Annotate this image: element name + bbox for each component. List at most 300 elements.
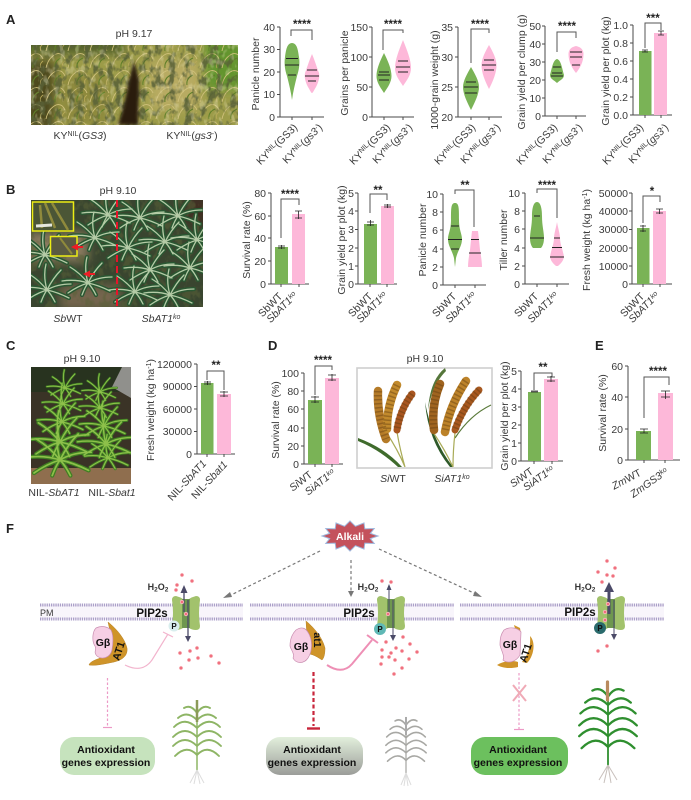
caption: KY NIL GS3: KY (54, 130, 68, 142)
bar chart: grain yield per plot: Grain yield per plot (kg) (600, 16, 612, 126)
caption: KY NIL gs3: KY (166, 130, 180, 142)
violin chart: tiller number: SbAT1 (525, 295, 556, 326)
label: PM: PM (40, 608, 54, 618)
violin chart: grain yield per clump: 30 (529, 57, 541, 69)
violin chart: panicle number: 4 (432, 244, 438, 256)
violin chart: panicle number: 10 (263, 89, 275, 101)
caption: KY NIL GS3: NIL (68, 131, 79, 138)
bar chart: grain yield per plot: 3 (511, 402, 517, 414)
caption: KY NIL GS3: ( (78, 130, 82, 142)
label: H2O2: O (368, 582, 375, 592)
channel: PIP2s right (597, 596, 625, 630)
label: H2O2: 2 (364, 586, 368, 594)
label: H2O2: 2 (375, 586, 379, 594)
violin chart: 1000-grain weight: gs3 (479, 126, 499, 146)
bar chart: survival rate: 100 (281, 368, 299, 380)
bar chart: survival rate: SiWT (287, 469, 315, 494)
violin chart: panicle number: NIL (265, 142, 278, 155)
bar chart: grain yield per plot: 2 (511, 420, 517, 432)
violin chart: grains per panicle: ( (388, 137, 399, 149)
bar chart: grain yield per plot: Grain yield per plot (kg) (336, 185, 348, 295)
box: antioxidant genes expression (60, 737, 155, 775)
arrow: alkali to left membrane (223, 551, 320, 598)
icon: wilted grey plant (386, 717, 426, 786)
box: antioxidant genes expression: genes expression (474, 757, 562, 769)
violin chart: panicle number: 0 (269, 112, 275, 124)
violin chart: grains per panicle: 50 (356, 82, 368, 94)
bar chart: survival rate: Survival rate (%) (241, 201, 253, 279)
violin chart: 1000-grain weight: 30 (441, 52, 453, 64)
bar chart: grain yield per plot: SiAT1 (521, 468, 551, 494)
violin chart: grains per panicle: NIL (358, 142, 371, 155)
violin chart: grains per panicle: (GS3) (365, 122, 393, 150)
channel: PIP2s middle (377, 596, 405, 630)
bar chart: fresh weight: 120000 (157, 359, 192, 371)
bar chart: fresh weight: 30000 (599, 224, 628, 236)
violin chart: grains per panicle: KY (370, 148, 389, 166)
box: antioxidant genes expression (471, 737, 568, 775)
violin chart: grains per panicle: - (403, 124, 410, 131)
arrow: H2O2 transport (180, 585, 191, 642)
bar chart: grain yield per plot (600, 13, 672, 168)
violin chart: 1000-grain weight: ) (492, 122, 503, 133)
bar chart: survival rate: 60 (287, 404, 299, 416)
protein complex: Gβ at1 (290, 621, 325, 662)
H2O2 molecules (174, 573, 221, 670)
caption: SiAT1ko: ko (462, 474, 470, 481)
caption: SiWT: SiWT (380, 473, 406, 485)
caption: SbWT: SbWT (53, 313, 83, 325)
box: antioxidant genes expression: Antioxidant (489, 744, 547, 756)
phospho site (168, 620, 180, 632)
divider: red dashed line (116, 200, 118, 307)
bar chart: grain yield per plot: ** (374, 185, 383, 197)
label: PIP2s: PIP2s (564, 607, 596, 619)
bar chart: fresh weight: 40000 (599, 206, 628, 218)
bar chart: fresh weight: 30000 (163, 426, 192, 438)
violin chart: grain yield per clump: 50 (529, 21, 541, 33)
icon: vigorous green plant (579, 682, 637, 783)
bar chart: survival rate: **** (281, 189, 299, 201)
protein complex: Gβ at1: Gβ (294, 641, 309, 653)
violin chart: 1000-grain weight: KY (432, 149, 451, 168)
label: H2O2: 2 (592, 586, 596, 594)
bar chart: grain yield per plot (336, 185, 397, 326)
caption: KY NIL GS3: GS3) (82, 130, 106, 142)
violin chart: grain yield per clump: KY (514, 149, 533, 168)
panel A: rice field trial (6, 12, 672, 168)
caption: NIL-SbAT1: NIL-SbAT1 (28, 487, 80, 499)
scenario 2: at1 mutant sensitive (266, 579, 426, 786)
label: H2O2: O (585, 582, 592, 592)
violin chart: 1000-grain weight: 35 (441, 22, 453, 34)
violin chart: grains per panicle: 150 (350, 22, 368, 34)
bar chart: grain yield per plot: KY (600, 149, 619, 168)
violin chart: panicle number: 8 (432, 207, 438, 219)
bar chart: survival rate: 0 (260, 279, 266, 291)
bar chart: survival rate: **** (314, 355, 332, 367)
bar chart: survival rate (241, 188, 309, 326)
violin chart: tiller number: 8 (514, 206, 520, 218)
icon: Alkali burst (322, 521, 378, 551)
violin chart: panicle number: KY (280, 148, 299, 166)
violin chart: 1000-grain weight: 20 (441, 112, 453, 124)
icon: blocked cross (513, 685, 526, 701)
bar chart: fresh weight: 90000 (163, 381, 192, 393)
bar chart: grain yield per plot: 3 (348, 224, 354, 236)
inhibition: at1 to P site (327, 635, 378, 670)
bar chart: fresh weight: NIL-SbAT1 (166, 458, 209, 503)
bar chart: fresh weight: -1 (582, 192, 589, 199)
violin chart: panicle number: Panicle number (250, 37, 262, 110)
heading: pH 9.10: pH 9.10 (407, 353, 444, 365)
photo: NIL sorghum plots (26, 367, 132, 484)
phospho site (594, 622, 606, 634)
violin chart: tiller number: 0 (514, 279, 520, 291)
label: PIP2s: PIP2s (136, 608, 168, 620)
violin chart: tiller number: 2 (514, 261, 520, 273)
panel letter A: A (6, 12, 16, 27)
label: H2O2: 2 (154, 586, 158, 594)
bar chart: survival rate: ZmGS3 (628, 470, 665, 500)
heading: pH 9.17: pH 9.17 (116, 28, 153, 40)
caption: KY NIL gs3: ) (214, 130, 218, 142)
bar chart: survival rate: ko (325, 468, 335, 478)
channel: PIP2s left (172, 596, 200, 630)
panel F: working model (6, 521, 664, 786)
stems and leaves (358, 438, 402, 467)
label: H2O2: 2 (165, 586, 169, 594)
panel letter B: B (6, 182, 15, 197)
bar chart: fresh weight: ) (145, 359, 157, 363)
bar chart: fresh weight: * (650, 186, 655, 198)
bar chart: survival rate: 20 (287, 441, 299, 453)
H2O2 molecules (379, 579, 419, 676)
panel D: foxtail millet trial (268, 338, 563, 498)
label: H2O2: 2 (581, 586, 585, 594)
violin chart: grain yield per clump: KY (540, 148, 559, 166)
bar chart: grain yield per plot: 4 (348, 206, 354, 218)
protein complex: Gβ AT1 dissociated: AT1 (517, 642, 535, 664)
violin chart: panicle number: SbWT (430, 290, 460, 320)
bar chart: grain yield per plot: 0.4 (613, 74, 628, 86)
violin chart: grains per panicle: **** (384, 19, 402, 31)
panel letter C: C (6, 338, 16, 353)
protein complex: Gβ at1: at1 (311, 632, 323, 648)
bar chart: fresh weight (581, 186, 672, 326)
violin chart: 1000-grain weight (429, 19, 503, 168)
bar chart: grain yield per plot: SbWT (346, 290, 376, 320)
bar chart: fresh weight: 0 (622, 279, 628, 291)
scenario 3: AT1 knockout tolerant (471, 559, 637, 783)
violin chart: 1000-grain weight: NIL (469, 141, 482, 154)
bar chart: survival rate: ko (287, 290, 297, 301)
bar chart: grain yield per plot: 5 (511, 366, 517, 378)
violin chart: grain yield per clump: (GS3) (532, 122, 560, 150)
caption: KY NIL gs3: - (212, 131, 215, 138)
bar chart: fresh weight: ) (581, 189, 593, 193)
arrow: H2O2 transport (386, 584, 396, 641)
photo: rice plots (31, 45, 238, 125)
violin chart: grains per panicle: 100 (350, 52, 368, 64)
bar chart: survival rate: 0 (293, 459, 299, 471)
violin chart: panicle number: ko (466, 290, 476, 301)
bar chart: grain yield per plot: 4 (511, 384, 517, 396)
violin chart: panicle number: gs3 (301, 126, 321, 146)
bar chart: fresh weight: ** (212, 360, 221, 372)
label: H2O2: H (148, 582, 154, 592)
box: antioxidant genes expression: genes expression (268, 757, 356, 769)
violin chart: 1000-grain weight: NIL (443, 142, 456, 155)
violin chart: panicle number: **** (293, 19, 311, 31)
violin chart: panicle number: ) (314, 122, 325, 133)
violin chart: 1000-grain weight: (GS3) (450, 122, 478, 150)
protein complex: Gβ AT1: Gβ (96, 637, 111, 649)
panicles (378, 381, 479, 439)
arrow: alkali to middle membrane (348, 560, 354, 597)
violin chart: tiller number (498, 180, 569, 326)
bar chart: fresh weight: 10000 (599, 261, 628, 273)
violin chart: grains per panicle (339, 19, 415, 168)
violin chart: grain yield per clump: Grain yield per clump (g) (516, 15, 528, 129)
bar chart: grain yield per plot: 0.0 (613, 110, 628, 122)
bar chart: grain yield per plot: 0.8 (613, 38, 628, 50)
bar chart: grain yield per plot: gs3 (647, 126, 667, 146)
bar chart: survival rate: SbWT (256, 290, 286, 320)
violin chart: grain yield per clump: 20 (529, 75, 541, 87)
violin chart: panicle number: ( (298, 137, 309, 149)
bar chart: fresh weight: Fresh weight (kg ha (145, 369, 157, 461)
phospho site: P (377, 625, 383, 634)
bar chart: grain yield per plot: Grain yield per plot (kg) (499, 361, 511, 471)
bar chart: fresh weight: ko (649, 290, 659, 301)
violin chart: tiller number: 4 (514, 243, 520, 255)
bar chart: grain yield per plot: NIL (611, 142, 624, 155)
bar chart: fresh weight: NIL-Sbat1 (189, 459, 230, 502)
protein complex: Gβ AT1 (89, 622, 128, 665)
panel E: maize trial (595, 338, 680, 501)
violin chart: panicle number: SbAT1 (443, 295, 474, 326)
bar chart: fresh weight: 0 (186, 449, 192, 461)
inhibition: strong block on genes (307, 672, 320, 728)
violin chart: grain yield per clump: NIL (551, 141, 564, 154)
bar chart: grain yield per plot: 0 (348, 279, 354, 291)
bar chart: survival rate: 60 (611, 361, 623, 373)
violin chart: panicle number: ** (461, 180, 470, 192)
caption: KY NIL gs3: gs3 (195, 130, 212, 142)
bar chart: grain yield per plot: SbAT1 (354, 295, 385, 326)
bar chart: survival rate: ZmWT (609, 467, 644, 493)
bar chart: grain yield per plot: 1 (348, 261, 354, 273)
bar chart: survival rate (597, 361, 680, 501)
label: H2O2: H (575, 582, 581, 592)
violin chart: grain yield per clump: 40 (529, 39, 541, 51)
violin chart: grains per panicle: gs3 (391, 126, 411, 146)
violin chart: 1000-grain weight: KY (458, 148, 477, 166)
violin chart: 1000-grain weight: 1000-grain weight (g) (429, 30, 441, 130)
bar chart: survival rate: 40 (611, 392, 623, 404)
violin chart: grain yield per clump: 10 (529, 93, 541, 105)
violin chart: grain yield per clump: **** (558, 21, 576, 33)
bar chart: survival rate (270, 355, 343, 498)
bar chart: fresh weight: SbAT1 (626, 295, 657, 326)
violin chart: tiller number: **** (538, 180, 556, 192)
violin chart: tiller number: 10 (508, 188, 520, 200)
bar chart: survival rate: 60 (254, 211, 266, 223)
bar chart: fresh weight: Fresh weight (kg ha (581, 199, 593, 291)
violin chart: grains per panicle: KY (347, 149, 366, 168)
violin chart: tiller number: Tiller number (498, 209, 510, 270)
bar chart: grain yield per plot: - (659, 124, 666, 131)
violin chart: panicle number: - (313, 124, 320, 131)
arrow: alkali to right membrane (379, 549, 482, 597)
violin chart: grain yield per clump: ( (558, 137, 569, 149)
bar chart: survival rate: 40 (254, 233, 266, 245)
bar chart: fresh weight: 60000 (163, 404, 192, 416)
scenario 1: wild-type AT1 (60, 573, 221, 784)
caption: SbAT1ko: ko (173, 314, 180, 321)
bar chart: grain yield per plot: 0.6 (613, 56, 628, 68)
bar chart: survival rate: ko (658, 466, 669, 476)
photo: millet panicles (357, 368, 492, 468)
bar chart: survival rate: 20 (611, 424, 623, 436)
bar chart: survival rate: **** (649, 366, 667, 378)
violin chart: tiller number: SbWT (512, 290, 542, 320)
violin chart: panicle number: Panicle number (417, 203, 429, 276)
violin chart: panicle number: 20 (263, 67, 275, 79)
caption: KY NIL gs3: ( (191, 130, 195, 142)
violin chart: panicle number (250, 19, 325, 168)
caption: SbAT1ko: SbAT1 (142, 313, 173, 325)
violin chart: panicle number: 30 (263, 44, 275, 56)
icon: healthy pale plant (173, 700, 221, 784)
bar chart: grain yield per plot: ** (539, 362, 548, 374)
bar chart: grain yield per plot: 2 (348, 243, 354, 255)
violin chart: panicle number: 0 (432, 280, 438, 292)
heading: pH 9.10: pH 9.10 (64, 353, 101, 365)
box: antioxidant genes expression (266, 737, 363, 775)
inset: yellow zoom boxes (32, 202, 77, 256)
box: antioxidant genes expression: Antioxidant (77, 744, 135, 756)
panel B: sorghum field trial (6, 180, 672, 326)
bar chart: grain yield per plot: NIL (637, 141, 650, 154)
violin chart: grain yield per clump: NIL (525, 142, 538, 155)
bar chart: grain yield per plot: ) (660, 122, 671, 133)
phospho site: P (597, 624, 603, 633)
violin chart: 1000-grain weight: **** (471, 19, 489, 31)
violin chart: grains per panicle: NIL (381, 141, 394, 154)
violin chart: panicle number: NIL (291, 141, 304, 154)
bar chart: grain yield per plot: ko (544, 464, 555, 474)
bar chart: grain yield per plot: 5 (348, 188, 354, 200)
bar chart: survival rate: 0 (617, 455, 623, 467)
caption: KY NIL gs3: NIL (180, 131, 191, 138)
violin chart: grain yield per clump: ) (574, 122, 585, 133)
arrow: H2O2 efflux (604, 582, 617, 640)
violin chart: tiller number: 6 (514, 224, 520, 236)
bar chart: grain yield per plot: 0.2 (613, 92, 628, 104)
caption: SiAT1ko: SiAT1 (434, 473, 462, 485)
violin chart: panicle number: KY (254, 149, 273, 168)
bar chart: fresh weight: -1 (146, 362, 153, 369)
bar chart: fresh weight: SbWT (618, 290, 648, 320)
violin chart: panicle number: 10 (426, 189, 438, 201)
protein complex: Gβ AT1 dissociated: Gβ (503, 639, 518, 651)
protein complex: Gβ AT1 dissociated (497, 625, 535, 668)
inhibition: to antioxidant genes (514, 673, 524, 730)
box: antioxidant genes expression: genes expression (62, 757, 150, 769)
violin chart: grain yield per clump (514, 15, 586, 168)
bar chart: grain yield per plot: SiWT (508, 465, 536, 490)
violin chart: tiller number: ko (548, 290, 558, 301)
bar chart: grain yield per plot: 0 (511, 456, 517, 468)
violin chart: panicle number (417, 180, 486, 326)
violin chart: panicle number: 6 (432, 225, 438, 237)
bar chart: grain yield per plot (499, 361, 563, 494)
panicle grain texture (378, 381, 479, 439)
bar chart: fresh weight (145, 359, 235, 503)
bar chart: survival rate: 40 (287, 423, 299, 435)
violin chart: grain yield per clump: gs3 (561, 126, 581, 146)
inhibition: AT1 to P site (125, 632, 173, 668)
photo: sorghum plots (31, 200, 203, 307)
phospho site: P (171, 622, 177, 631)
violin chart: grains per panicle: Grains per panicle (339, 30, 351, 116)
violin chart: 1000-grain weight: ( (476, 137, 487, 149)
bar chart: survival rate: Survival rate (%) (597, 374, 609, 452)
arrow: red pointer lower (83, 270, 95, 278)
bar chart: survival rate: Survival rate (%) (270, 381, 282, 459)
bar chart: survival rate: SiAT1 (303, 471, 332, 498)
bar chart: survival rate: 80 (287, 386, 299, 398)
violin chart: grain yield per clump: - (573, 124, 580, 131)
label: H2O2: H (358, 582, 364, 592)
bar chart: grain yield per plot: *** (646, 13, 660, 25)
H2O2 molecules (596, 559, 617, 653)
label: PIP2s: PIP2s (343, 608, 375, 620)
heading: pH 9.10: pH 9.10 (100, 185, 137, 197)
box: antioxidant genes expression: Antioxidant (283, 744, 341, 756)
violin chart: grains per panicle: ) (404, 122, 415, 133)
bar chart: grain yield per plot: (GS3) (618, 122, 646, 150)
bar chart: survival rate: SbAT1 (264, 295, 295, 326)
bar chart: fresh weight: 50000 (599, 188, 628, 200)
bar chart: grain yield per plot: KY (626, 148, 645, 166)
bar chart: grain yield per plot: ko (377, 290, 387, 301)
panel letter F: F (6, 521, 14, 536)
violin chart: grains per panicle: 0 (362, 112, 368, 124)
violin chart: 1000-grain weight: 25 (441, 82, 453, 94)
protein complex: Gβ AT1: AT1 (110, 640, 128, 662)
violin chart: panicle number: 40 (263, 22, 275, 34)
bar chart: survival rate: 20 (254, 256, 266, 268)
bar chart: fresh weight: 20000 (599, 243, 628, 255)
bar chart: survival rate: 80 (254, 188, 266, 200)
violin chart: 1000-grain weight: - (491, 124, 498, 131)
violin chart: grain yield per clump: 0 (535, 111, 541, 123)
bar chart: grain yield per plot: ( (644, 137, 655, 149)
panel letter E: E (595, 338, 604, 353)
bar chart: grain yield per plot: 1.0 (613, 20, 628, 32)
violin chart: panicle number: (GS3) (272, 122, 300, 150)
label: H2O2: O (158, 582, 165, 592)
inhibition: to antioxidant genes (103, 678, 112, 728)
violin chart: panicle number: 2 (432, 262, 438, 274)
icon: Alkali burst: Alkali (336, 531, 364, 543)
arrow: red pointer upper (71, 244, 83, 250)
membrane: plasma membrane segments (40, 605, 664, 619)
panel letter D: D (268, 338, 277, 353)
